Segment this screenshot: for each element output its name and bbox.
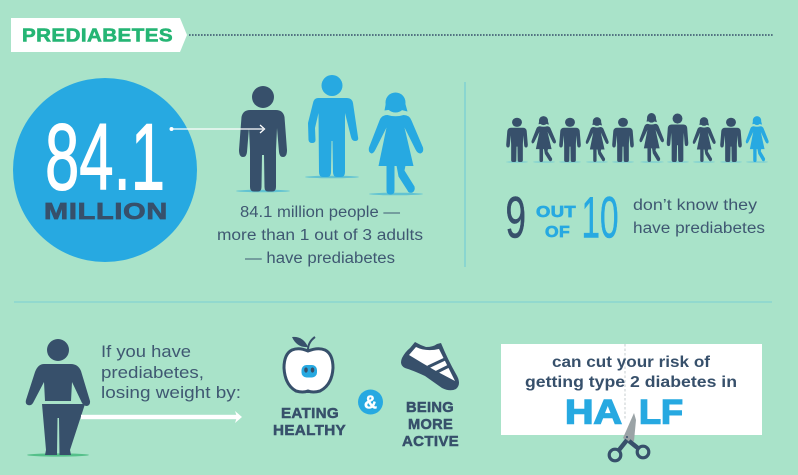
icon row: ten people, one highlighted [506,113,769,163]
icon: scissors [609,413,649,461]
arrow: weight loss [81,411,242,423]
title banner: PREDIABETES [22,24,173,46]
icon: running shoe [401,342,459,390]
label: being more active: BEING [406,399,454,416]
stat: 9 out of 10: 10 [582,186,618,250]
caption: don't know: don’t know they [633,197,757,214]
label: being more active: ACTIVE [402,433,459,450]
panel: cut risk in half: can cut your risk of [552,354,711,371]
icon: apple [284,337,333,392]
caption: don't know [633,197,765,237]
stat: 9 out of 10: OUT [536,204,576,221]
caption: 84.1 million people: — have prediabetes [245,250,395,267]
label: eating healthy [273,405,346,439]
big number circle: 84.1 million: MILLION [44,198,168,224]
text: if you have prediabetes: losing weight by: [101,383,241,402]
label: eating healthy: HEALTHY [273,422,346,439]
panel: cut risk in half: getting type 2 diabetes in [525,374,737,391]
big number circle: 84.1 million [13,78,197,262]
stat: 9 out of 10: OF [545,224,570,241]
ampersand badge [358,390,383,414]
panel: cut risk in half [501,344,762,435]
stat: 9 out of 10 [506,186,618,250]
label: being more active [402,399,459,450]
big number circle: 84.1 million: 84.1 [45,104,165,210]
caption: 84.1 million people: more than 1 out of 3 adults [217,227,423,244]
ampersand badge: & [364,392,377,412]
text: if you have prediabetes: prediabetes, [101,363,204,382]
text: if you have prediabetes [101,342,241,402]
text: if you have prediabetes: If you have [101,342,191,361]
label: eating healthy: EATING [281,405,339,422]
icon: person losing weight [26,339,90,457]
panel: cut risk in half: HA [565,394,622,432]
panel: cut risk in half: LF [639,394,683,432]
title banner [11,18,187,52]
caption: don't know: have prediabetes [633,220,765,237]
icon: three adults, one highlighted [236,75,423,195]
stat: 9 out of 10: 9 [506,186,526,250]
label: being more active: MORE [408,416,453,433]
caption: 84.1 million people: 84.1 million people — [240,204,401,221]
caption: 84.1 million people [217,204,423,267]
arrow from circle to person [170,125,264,133]
